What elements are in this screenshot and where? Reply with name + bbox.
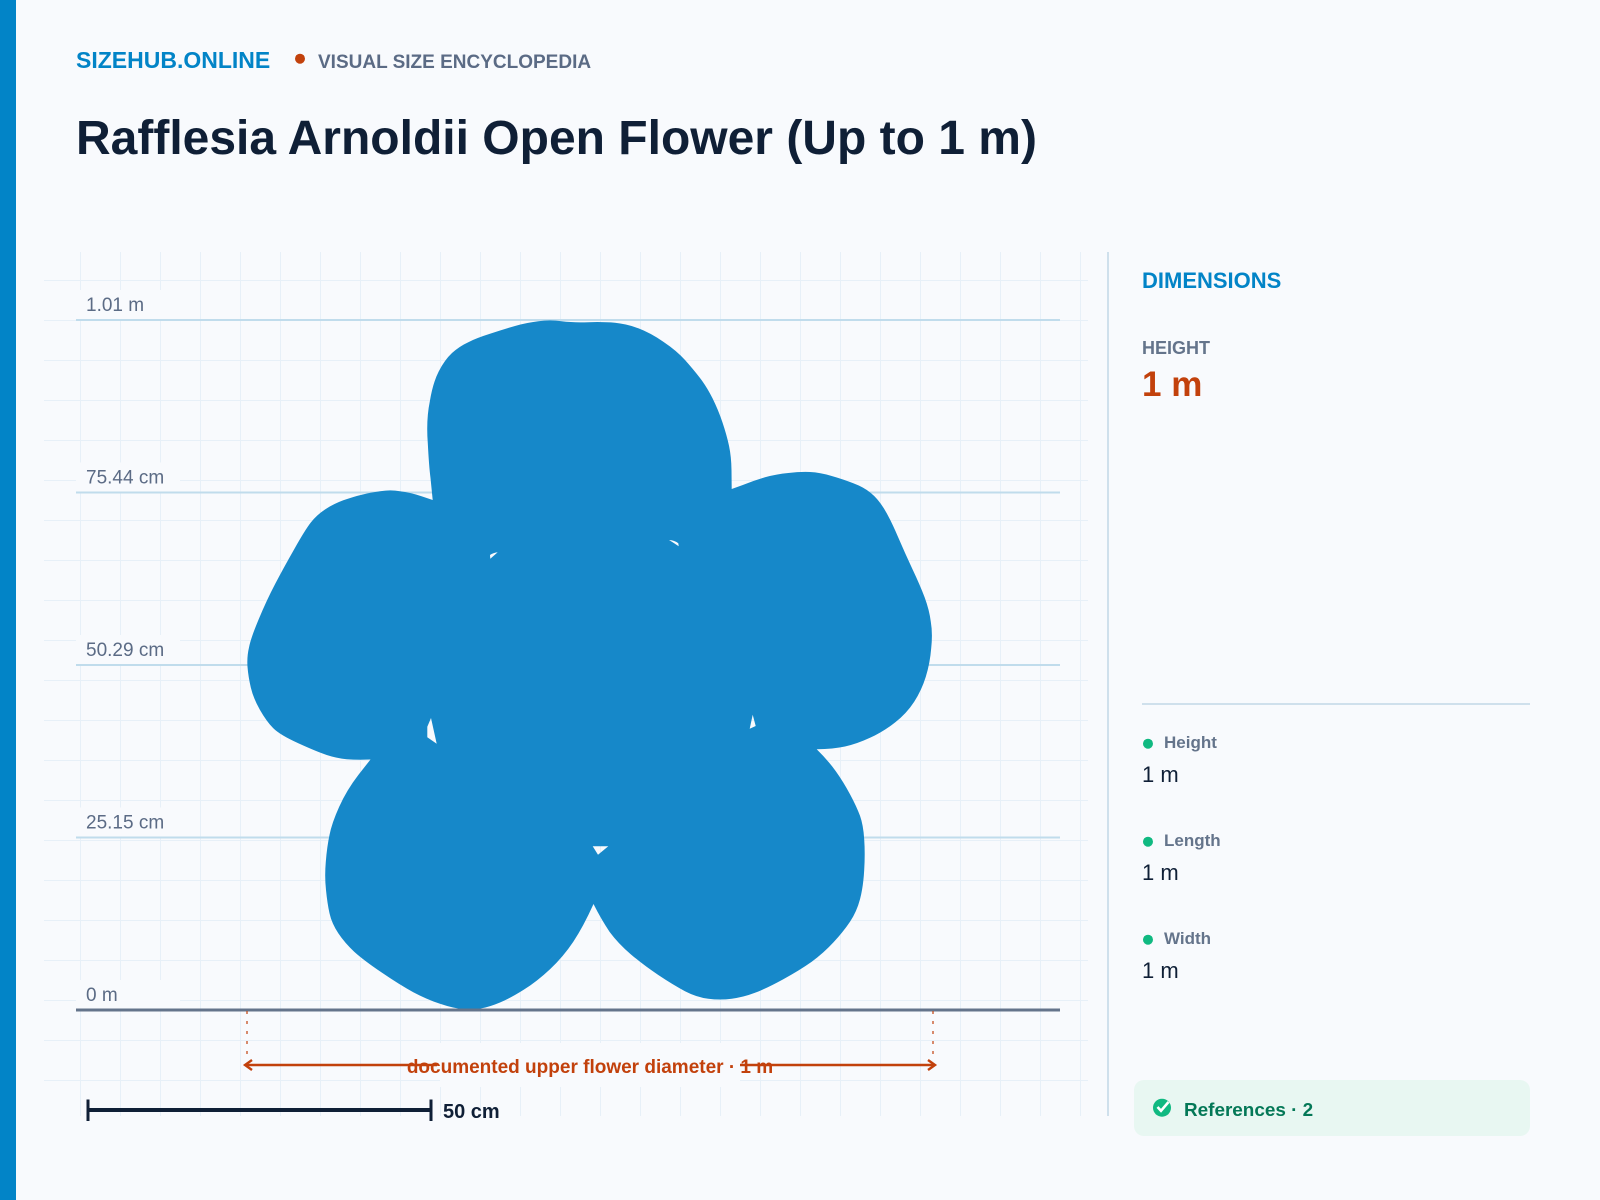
height axis labels: 25.15 cm — [86, 812, 164, 834]
ground baseline — [76, 1008, 1060, 1012]
primary metric value: 1 m — [1142, 365, 1202, 404]
references callout — [1134, 1080, 1530, 1136]
dimensions heading: DIMENSIONS — [1142, 268, 1281, 293]
metric row: width: 1 m — [1142, 958, 1179, 983]
metric row: width: Width — [1164, 929, 1211, 948]
brand separator dot — [295, 54, 305, 64]
height axis labels: 1.01 m — [86, 295, 144, 316]
references text: References · 2 — [1184, 1100, 1313, 1121]
primary metric label: HEIGHT — [1142, 338, 1210, 358]
metric row: height — [1142, 733, 1217, 787]
width dimension label: documented upper flower diameter · 1 m — [407, 1057, 773, 1078]
height axis labels — [86, 295, 164, 1006]
height axis labels: 0 m — [86, 985, 118, 1006]
metric row: length: Length — [1164, 831, 1221, 850]
left accent bar — [0, 0, 16, 1200]
panel: dimensions — [1134, 268, 1530, 1136]
metric row: height: Height — [1164, 733, 1217, 752]
metric row: width — [1142, 929, 1211, 983]
scale bar label: 50 cm — [443, 1101, 500, 1123]
panel: size chart — [44, 252, 1088, 1123]
metric row: height: 1 m — [1142, 762, 1179, 787]
height axis labels: 75.44 cm — [86, 468, 164, 488]
panel divider — [1107, 252, 1109, 1116]
brand name: SIZEHUB.ONLINE — [76, 47, 270, 73]
brand tagline: VISUAL SIZE ENCYCLOPEDIA — [318, 52, 591, 73]
metric row: length: 1 m — [1142, 860, 1179, 885]
header brand line — [76, 47, 591, 73]
flower silhouette — [247, 320, 932, 1010]
metric row: length — [1142, 831, 1221, 885]
title: Rafflesia Arnoldii Open Flower (Up to 1 m) — [76, 112, 1037, 165]
icon: check circle — [1153, 1099, 1171, 1117]
width dimension arrow — [245, 1011, 935, 1070]
height axis labels: 50.29 cm — [86, 640, 164, 661]
height guide lines — [76, 320, 1060, 838]
